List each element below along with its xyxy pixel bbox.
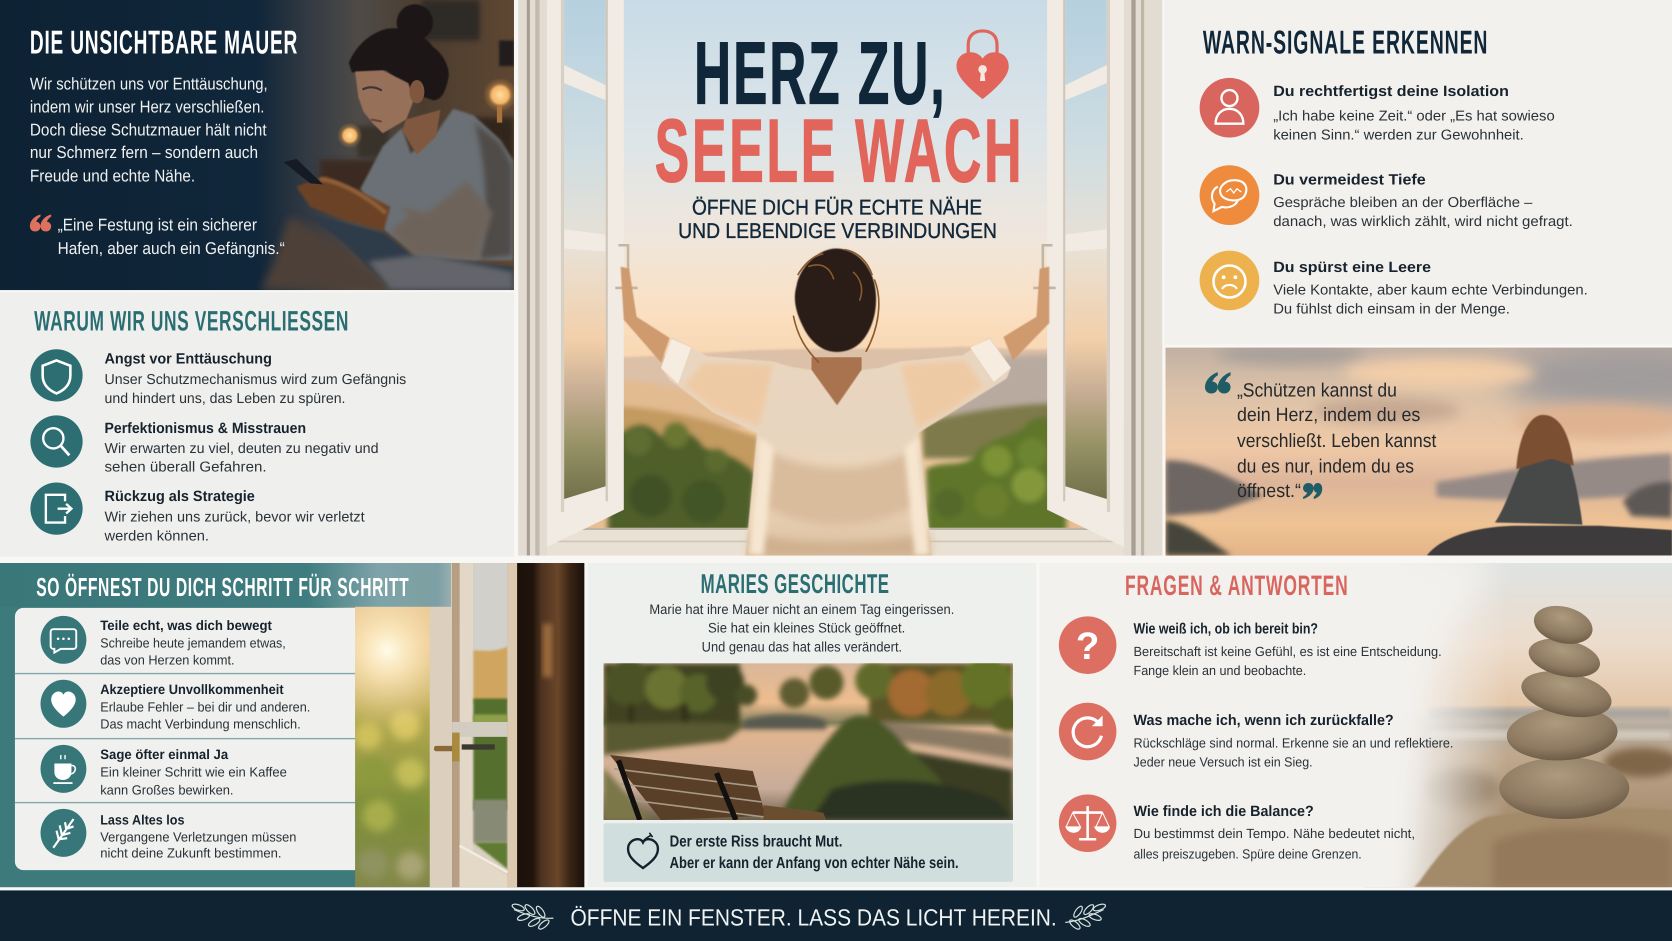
callout: Aber er kann der Anfang von echter Nähe sein. (670, 854, 959, 872)
window frame left (518, 0, 547, 556)
step: Sage Ja: Sage öfter einmal Ja (100, 746, 229, 762)
photo: lake and person (1165, 342, 1672, 556)
hero title: SEELE WACH (655, 100, 1021, 200)
hero title: HERZ ZU, (694, 23, 945, 123)
faq: bereit: Wie weiß ich, ob ich bereit bin? (1134, 620, 1318, 637)
footer banner (0, 890, 1672, 941)
step: Sage Ja: kann Großes bewirken. (100, 783, 234, 798)
item: Isolation: Du rechtfertigst deine Isolation (1273, 82, 1509, 99)
step: Teile echt: das von Herzen kommt. (100, 653, 235, 668)
faq: bereit: Bereitschaft ist keine Gefühl, es ist eine Entscheidung. (1134, 644, 1442, 659)
heading: SO ÖFFNEST DU DICH SCHRITT FÜR SCHRITT (36, 574, 409, 602)
faq: balance: Wie finde ich die Balance? (1134, 802, 1314, 819)
panel: warn-signale erkennen (1164, 0, 1672, 344)
quote text: du es nur, indem du es (1237, 455, 1414, 477)
item: Rückzug (30, 483, 365, 544)
bench (604, 755, 826, 820)
trees left (608, 422, 759, 533)
item: Tiefe (1200, 165, 1573, 229)
faq: bereit (1059, 616, 1442, 678)
step: Lass Altes los (41, 809, 296, 861)
step: Lass Altes los: nicht deine Zukunft bestimmen. (100, 846, 282, 861)
window frame right (1124, 0, 1162, 556)
callout: Der erste Riss braucht Mut. (670, 833, 842, 851)
step: Akzeptiere: Erlaube Fehler – bei dir und anderen. (100, 700, 310, 714)
quote (30, 214, 285, 258)
faq: balance: Du bestimmst dein Tempo. Nähe bedeutet nicht, (1134, 826, 1415, 841)
intro text (30, 76, 268, 186)
woman from behind (621, 248, 1049, 556)
item: Isolation: keinen Sinn.“ werden zur Gewohnheit. (1273, 127, 1524, 143)
item: Tiefe: Du vermeidest Tiefe (1273, 171, 1426, 188)
icon: left sprig (511, 903, 553, 931)
panel: schritt für schritt (0, 563, 584, 887)
icon: closing quote (1303, 483, 1322, 499)
intro text: nur Schmerz fern – sondern auch (30, 144, 258, 162)
heading: DIE UNSICHTBARE MAUER (30, 23, 297, 61)
trees right (926, 417, 1066, 533)
item: Angst (30, 349, 407, 406)
step: Lass Altes los: Lass Altes los (100, 812, 184, 827)
step: Teile echt (41, 616, 286, 668)
item: Isolation (1200, 78, 1555, 143)
faq: bereit: Fange klein an und beobachte. (1134, 663, 1306, 678)
item: Perfektionismus: sehen überall Gefahren. (104, 459, 267, 475)
faq: zurückfallen: Rückschläge sind normal. Erkenne sie an und reflektiere. (1134, 736, 1453, 751)
item: Rückzug: Wir ziehen uns zurück, bevor wir verletzt (104, 509, 365, 525)
intro text: Wir schützen uns vor Enttäuschung, (30, 76, 268, 94)
door handle (434, 733, 495, 761)
item: Leere: Du spürst eine Leere (1273, 258, 1431, 275)
door frame (430, 563, 517, 887)
item: Rückzug: Rückzug als Strategie (104, 487, 255, 504)
story text: Sie hat ein kleines Stück geöffnet. (708, 620, 905, 636)
step: Akzeptiere: Akzeptiere Unvollkommenheit (100, 681, 284, 697)
heading: MARIES GESCHICHTE (701, 569, 889, 599)
quote text: öffnest.“ (1237, 480, 1301, 501)
window sill (547, 528, 1124, 556)
quote: Hafen, aber auch ein Gefängnis.“ (58, 240, 285, 258)
window sash left (547, 0, 624, 547)
footer text: ÖFFNE EIN FENSTER. LASS DAS LICHT HEREIN. (570, 904, 1057, 931)
hero subtitle (678, 196, 997, 243)
step: Sage Ja (41, 745, 287, 798)
heading: WARN-SIGNALE ERKENNEN (1203, 23, 1487, 61)
title band (0, 563, 451, 607)
item: Leere: Viele Kontakte, aber kaum echte Verbindungen. (1273, 282, 1588, 298)
quote: „Eine Festung ist ein sicherer (58, 216, 258, 235)
quote text: verschließt. Leben kannst (1237, 430, 1436, 451)
intro text: Doch diese Schutzmauer hält nicht (30, 122, 267, 140)
hero subtitle: UND LEBENDIGE VERBINDUNGEN (678, 220, 997, 243)
item: Perfektionismus (30, 415, 379, 475)
story text (649, 601, 954, 655)
wooden door (517, 563, 584, 887)
window sash right (1047, 0, 1124, 547)
faq: bereit: ? (1076, 624, 1099, 668)
photo: woman with phone (260, 0, 517, 290)
item: Perfektionismus: Perfektionismus & Misstrauen (104, 419, 306, 436)
step: Akzeptiere: Das macht Verbindung menschlich. (100, 717, 301, 732)
item: Tiefe: danach, was wirklich zählt, wird nicht gefragt. (1273, 213, 1573, 229)
icon: opening quote (1205, 372, 1231, 393)
photo: park bench by river (604, 657, 1025, 820)
icon: right sprig (1065, 903, 1106, 931)
heading: FRAGEN & ANTWORTEN (1125, 569, 1348, 601)
item: Perfektionismus: Wir erwarten zu viel, deuten zu negativ und (104, 440, 379, 456)
item: Leere (1200, 251, 1588, 317)
panel: fragen und antworten (1040, 563, 1672, 887)
photo: stacked stones (1365, 563, 1672, 888)
faq: balance (1059, 794, 1415, 862)
window handles (615, 245, 1056, 288)
quote text: dein Herz, indem du es (1237, 404, 1420, 425)
faq: zurückfallen (1059, 703, 1453, 770)
faq: zurückfallen: Was mache ich, wenn ich zurückfalle? (1134, 711, 1394, 728)
item: Angst: Angst vor Enttäuschung (104, 350, 272, 367)
panel: die unsichtbare Mauer (0, 0, 517, 290)
faq: zurückfallen: Jeder neue Versuch ist ein Sieg. (1134, 755, 1313, 770)
story text: Marie hat ihre Mauer nicht an einem Tag eingerissen. (649, 601, 954, 617)
panel: maries geschichte (588, 563, 1036, 887)
hero subtitle: ÖFFNE DICH FÜR ECHTE NÄHE (692, 196, 982, 220)
item: Angst: Unser Schutzmechanismus wird zum Gefängnis (104, 371, 407, 387)
faq: balance: alles preiszugeben. Spüre deine Grenzen. (1134, 847, 1362, 862)
hero title (655, 23, 1021, 200)
item: Rückzug: werden können. (103, 528, 209, 544)
item: Angst: und hindert uns, das Leben zu spüren. (104, 390, 345, 406)
step: Teile echt: Schreibe heute jemandem etwas, (100, 636, 286, 650)
panel: hero window (518, 0, 1162, 556)
item: Tiefe: Gespräche bleiben an der Oberfläche – (1273, 194, 1533, 210)
step: Sage Ja: Ein kleiner Schritt wie ein Kaffee (100, 765, 287, 780)
intro text: indem wir unser Herz verschließen. (30, 99, 264, 117)
icon: heart lock (956, 31, 1009, 99)
item: Leere: Du fühlst dich einsam in der Menge. (1273, 301, 1510, 317)
heading: WARUM WIR UNS VERSCHLIESSEN (34, 305, 348, 337)
icon: cracked heart (628, 833, 658, 868)
quote text (1237, 380, 1436, 501)
panel: warum wir uns verschliessen (0, 292, 514, 557)
card (15, 608, 355, 870)
item: Isolation: „Ich habe keine Zeit.“ oder „Es hat sowieso (1273, 108, 1555, 124)
story text: Und genau das hat alles verändert. (702, 639, 902, 655)
callout (604, 823, 1013, 882)
photo: garden and door (307, 563, 584, 887)
quote text: „Schützen kannst du (1237, 380, 1397, 401)
step: Akzeptiere (41, 680, 310, 732)
step: Teile echt: Teile echt, was dich bewegt (100, 617, 273, 633)
photo: sky and landscape (518, 0, 1162, 556)
intro text: Freude und echte Nähe. (30, 167, 195, 186)
step: Lass Altes los: Vergangene Verletzungen müssen (100, 830, 296, 845)
panel: quote sunset (1165, 342, 1672, 556)
